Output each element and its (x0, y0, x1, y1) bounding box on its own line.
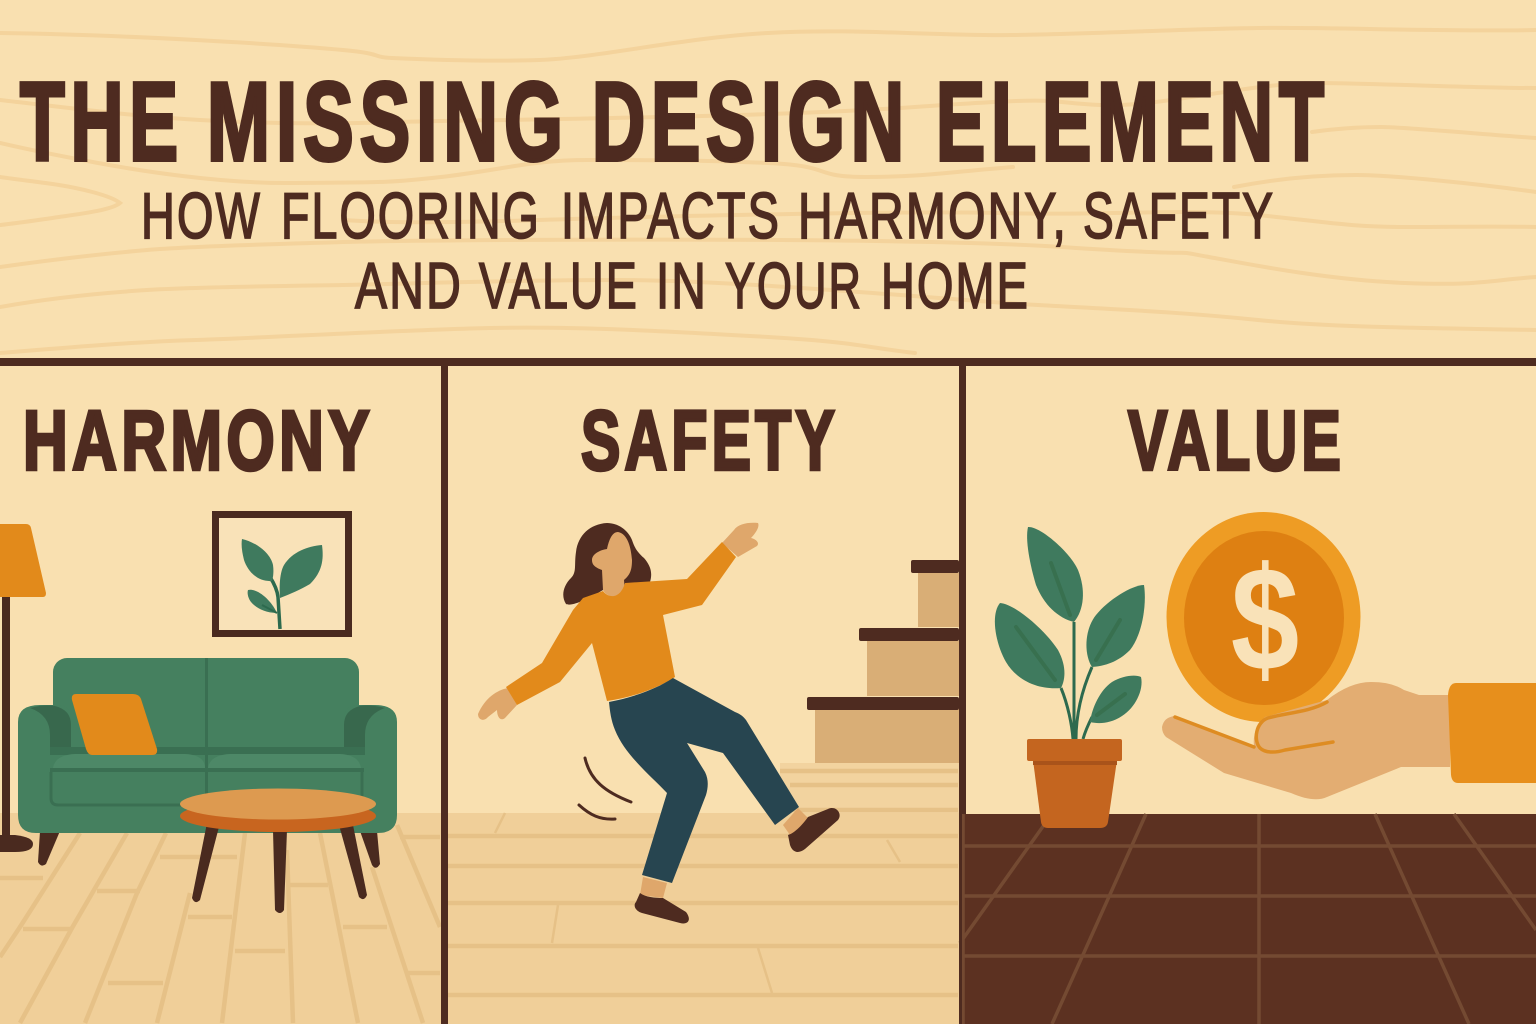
staircase (807, 560, 959, 763)
subtitle: FLOORING (281, 179, 541, 252)
subtitle: HOW (141, 179, 262, 252)
ankles (783, 808, 812, 835)
face and neck (592, 532, 632, 597)
icon: floor lamp (0, 524, 46, 852)
subtitle: IN (656, 249, 708, 322)
title: MISSING (207, 60, 569, 184)
title: ELEMENT (936, 60, 1330, 184)
floor: planks (448, 763, 960, 1024)
shoes (788, 808, 840, 852)
subtitle (141, 179, 1275, 322)
sweater (506, 542, 736, 705)
subtitle: VALUE (479, 249, 639, 322)
framed plant picture (216, 514, 348, 634)
hair (563, 523, 651, 605)
sleeve (1448, 683, 1536, 783)
sofa legs (38, 831, 380, 868)
floor: light wood planks (0, 813, 441, 1024)
title: DESIGN (592, 60, 910, 184)
subtitle: SAFETY (1083, 179, 1275, 252)
slipping woman (478, 523, 840, 923)
coffee table (180, 788, 376, 913)
subtitle: AND (355, 249, 463, 322)
hand holding coin (1162, 682, 1536, 799)
title: THE (20, 60, 184, 184)
subtitle: YOUR (725, 249, 863, 322)
hands (722, 523, 758, 557)
coin (1166, 512, 1360, 722)
panel: value (960, 394, 1536, 1024)
sofa pillow (72, 694, 157, 755)
motion lines (579, 758, 631, 819)
subtitle: HARMONY, (798, 179, 1068, 252)
coin: $ (1231, 536, 1299, 702)
pants (609, 678, 799, 883)
potted plant (995, 527, 1145, 828)
sofa (18, 658, 397, 868)
heading: value: VALUE (1128, 394, 1345, 488)
subtitle: HOME (881, 249, 1030, 322)
title (20, 60, 1330, 184)
panel: harmony (0, 394, 441, 1024)
subtitle: IMPACTS (561, 179, 781, 252)
heading: safety: SAFETY (581, 394, 839, 488)
floor: dark tiles (960, 814, 1536, 1024)
heading: harmony: HARMONY (23, 394, 374, 488)
panel: safety (448, 394, 960, 1024)
